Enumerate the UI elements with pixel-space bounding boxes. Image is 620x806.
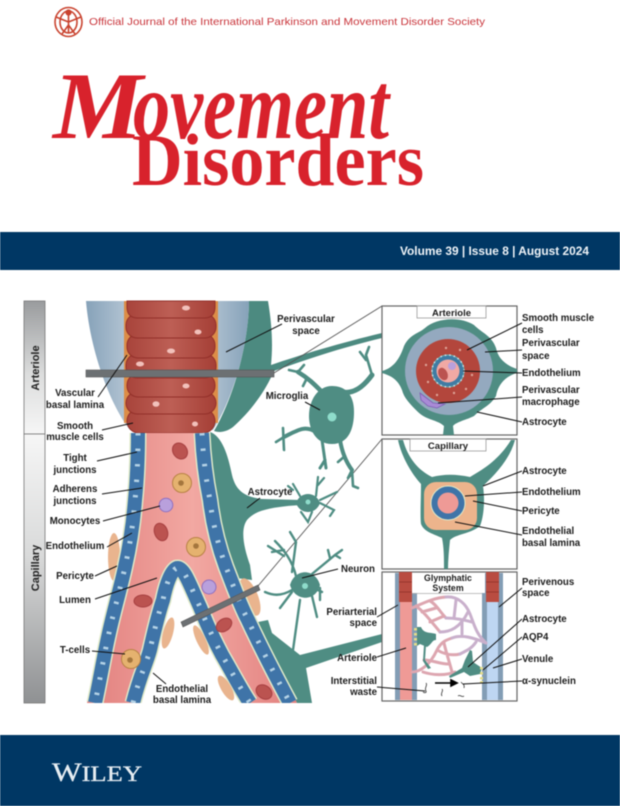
journal title (51, 53, 424, 202)
connector lines to insets (258, 306, 382, 586)
muscle ring (416, 339, 480, 403)
inset: arteriole cross-section (382, 306, 517, 435)
region scale: arteriole (24, 301, 45, 434)
labels: right column: α-synuclein (522, 676, 576, 687)
endothelium ring (432, 355, 464, 387)
labels: centre: waste (349, 687, 378, 698)
capillary astrocyte end-foot (210, 432, 300, 580)
labels: centre: Interstitial (331, 676, 377, 687)
astrocyte sheath (398, 440, 515, 569)
labels: centre: Endothelial (156, 684, 208, 695)
publisher footer: WILEY (52, 758, 142, 787)
lumen (438, 492, 458, 514)
labels: left column: Lumen (59, 595, 91, 606)
lumen (436, 360, 460, 382)
labels: centre: space (350, 618, 378, 629)
fork basal lamina (133, 568, 250, 703)
purple leukocytes (159, 498, 216, 594)
arteriole astrocyte end-foot (214, 301, 382, 432)
labels: right column: Endothelial (522, 526, 574, 537)
labels: left column: junctions (52, 496, 97, 507)
labels: left column: Pericyte (56, 571, 94, 582)
vascular network (412, 597, 486, 675)
labels: centre: Periarterial (326, 607, 377, 618)
macrophage (420, 393, 445, 408)
AQP4 markers (414, 628, 483, 684)
labels: left column: T-cells (60, 645, 90, 656)
issue banner (0, 232, 620, 270)
fork notch (141, 580, 240, 704)
labels: left column: Vascular (55, 388, 95, 399)
labels: left column: muscle cells (46, 432, 104, 443)
labels: left column: Smooth (57, 421, 93, 432)
labels: right column: AQP4 (522, 632, 549, 643)
smooth muscle layer (124, 301, 218, 433)
labels: left column: Tight (63, 453, 88, 464)
title: System (432, 583, 464, 593)
labels: right column: Astrocyte (522, 614, 567, 625)
labels: right column: Perivascular (522, 385, 580, 396)
microglia (276, 347, 372, 488)
capillary vessel (87, 433, 297, 703)
labels: right column: basal lamina (522, 538, 581, 549)
journal title: M (51, 53, 147, 159)
society logo (55, 8, 82, 36)
labels: left column: junctions (52, 465, 97, 476)
labels: right column: space (522, 588, 550, 599)
flow arrow (435, 680, 457, 686)
title (412, 573, 485, 594)
labels: centre: Microglia (266, 391, 309, 402)
pericytes in the notch (159, 616, 237, 703)
journal title: ovement (133, 53, 391, 159)
labels: centre: Astrocyte (248, 487, 293, 498)
labels: left column (46, 388, 105, 656)
labels: right column: Perivenous (522, 577, 574, 588)
interstitial waste debris (423, 682, 464, 697)
labels: centre: basal lamina (153, 695, 212, 706)
monocytes (122, 474, 206, 668)
tight junctions (95, 433, 290, 703)
red blood cells (134, 440, 275, 702)
labels: centre: space (292, 326, 320, 337)
labels: right column: cells (522, 325, 544, 336)
labels: centre: Arteriole (337, 653, 378, 664)
labels: left column: Monocytes (50, 516, 100, 527)
labels: right column: Astrocyte (522, 417, 567, 428)
labels: left column: Endothelium (46, 541, 105, 552)
astrocyte sheath (382, 319, 517, 435)
issue banner: Volume 39 | Issue 8 | August 2024 (400, 244, 589, 258)
title tab: Arteriole (432, 308, 471, 319)
neuron (265, 532, 342, 660)
outer pericytes (108, 533, 265, 619)
labels: left column: Adherens (53, 484, 97, 495)
labels: right column: macrophage (522, 397, 580, 408)
labels: left column: basal lamina (46, 400, 105, 411)
arteriole section bar (86, 370, 274, 377)
region scale: arteriole: Arteriole (30, 345, 42, 391)
inset: glymphatic system (382, 572, 517, 701)
basal lamina (95, 433, 290, 703)
region scale: capillary: Capillary (30, 544, 42, 591)
lumen (87, 433, 297, 703)
pericyte (424, 482, 477, 530)
labels: right column: space (522, 351, 550, 362)
perivascular ring (405, 327, 493, 415)
endothelium wall (95, 433, 290, 703)
leader lines (92, 323, 522, 691)
lower astrocyte branch (258, 620, 382, 703)
labels: right column (522, 313, 595, 687)
labels: right column: Endothelium (522, 487, 581, 498)
venule column (482, 572, 503, 700)
labels: right column: Pericyte (522, 506, 560, 517)
perivascular space (86, 301, 249, 430)
labels: right column: Smooth muscle (522, 313, 595, 324)
labels: right column: Endothelium (522, 368, 581, 379)
arteriole column (395, 572, 417, 700)
astrocytes (417, 627, 482, 678)
title tab: Capillary (428, 441, 469, 452)
title: Glymphatic (424, 573, 472, 583)
labels: right column: Venule (522, 654, 554, 665)
society tagline: Official Journal of the International Parkinson and Movement Disorder Society (89, 16, 486, 28)
labels: centre: Perivascular (277, 314, 335, 325)
journal title: Disorders (132, 120, 424, 202)
astrocyte cell (288, 477, 337, 522)
publisher footer (0, 735, 620, 806)
endothelium ring (431, 486, 465, 520)
labels: centre: Neuron (341, 564, 375, 575)
labels: centre (153, 314, 378, 706)
inset: capillary cross-section (382, 439, 517, 569)
labels: right column: Perivascular (522, 338, 580, 349)
region scale: capillary (24, 434, 45, 703)
labels: right column: Astrocyte (522, 466, 567, 477)
capillary section bar (181, 585, 260, 627)
